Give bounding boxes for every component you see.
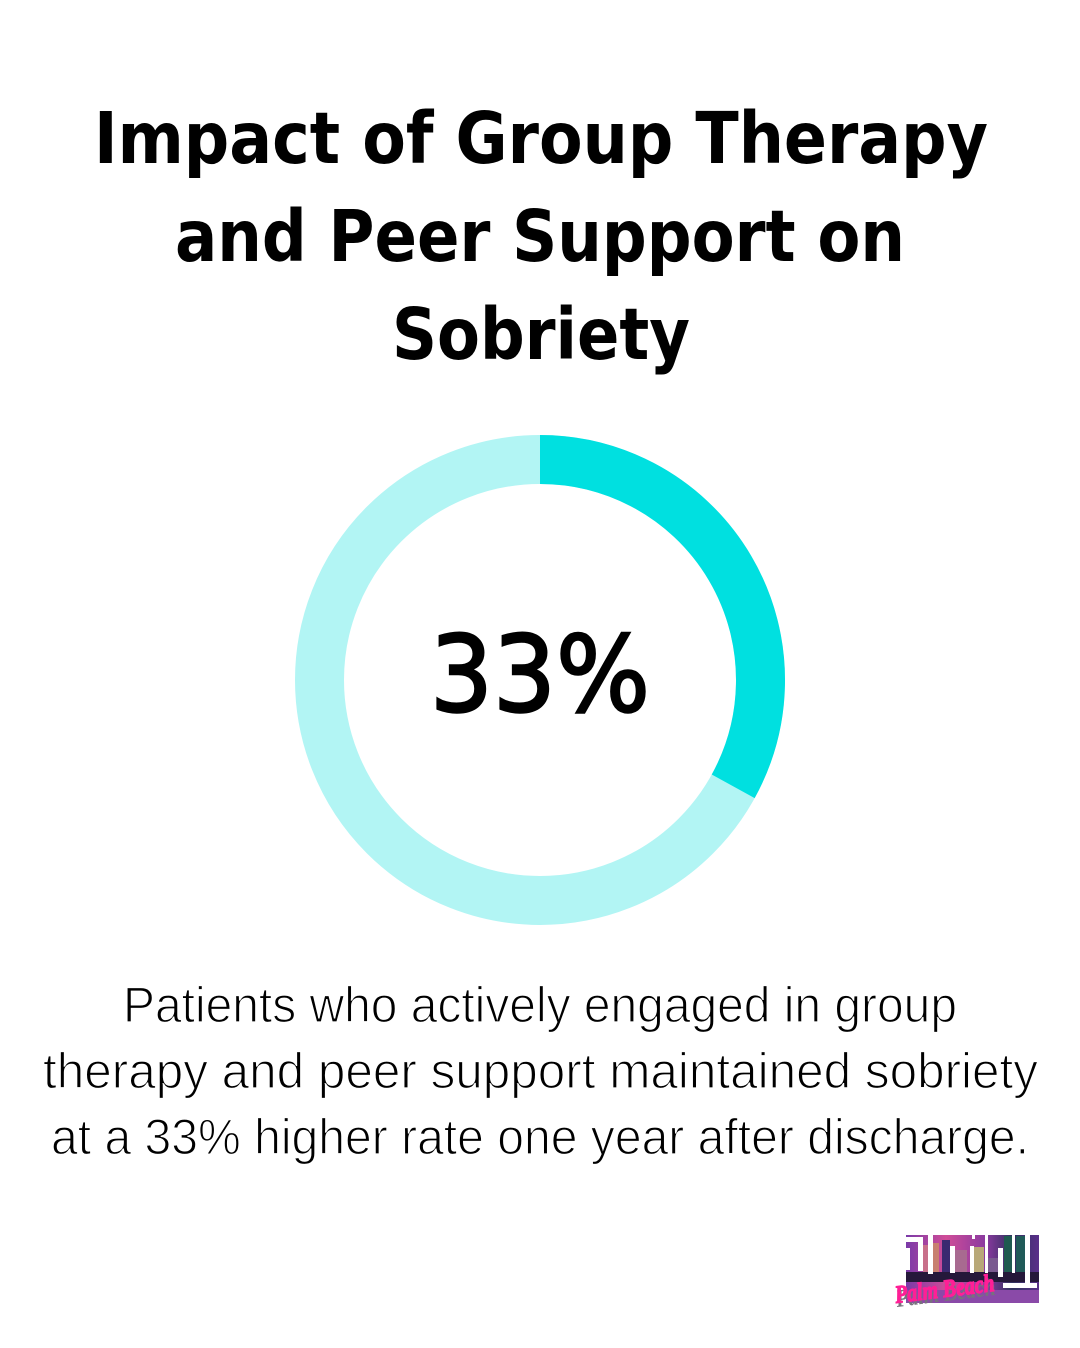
title: Sobriety: [392, 293, 690, 376]
logo letters: white gaps: [906, 1230, 1037, 1288]
description text: therapy and peer support maintained sobriety: [43, 1043, 1038, 1099]
title: Impact of Group Therapy: [94, 97, 988, 180]
description text: [43, 977, 1038, 1165]
description text: at a 33% higher rate one year after discharge.: [51, 1109, 1029, 1165]
donut chart: 33%: [320, 460, 761, 900]
logo photo: city skyline: [906, 1235, 1039, 1303]
donut value: 33%: [430, 614, 650, 736]
title: [94, 97, 988, 376]
logo: Amity Palm Beach: [893, 1230, 1039, 1313]
title: and Peer Support on: [175, 195, 905, 278]
description text: Patients who actively engaged in group: [123, 977, 957, 1033]
logo script: Palm Beach: Palm Beach: [893, 1270, 996, 1309]
logo script: Palm Beach: Palm Beach: [894, 1274, 997, 1313]
